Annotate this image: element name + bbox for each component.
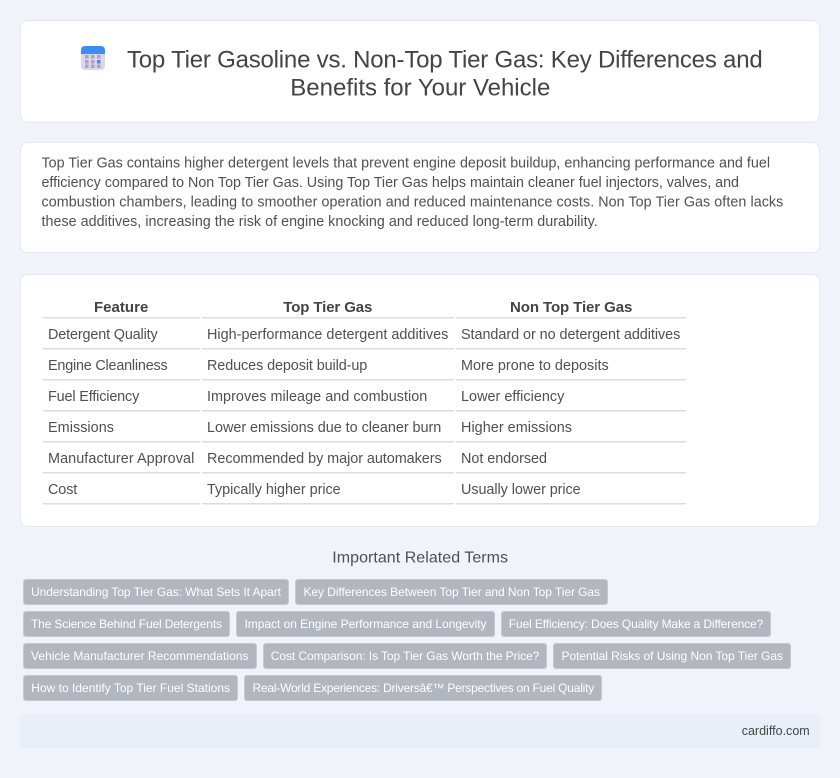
panel: title header <box>20 20 820 122</box>
tag: key differences <box>296 580 608 604</box>
table row: emissions: Higher emissions <box>461 420 572 436</box>
table row: fuel efficiency: Lower efficiency <box>461 389 565 405</box>
table row: manufacturer approval: Not endorsed <box>461 451 547 467</box>
text block: summary: these additives, increasing the risk of engine knocking and reduced long-term durability. <box>42 214 598 230</box>
table row: engine cleanliness: More prone to deposits <box>461 358 609 374</box>
title: Benefits for Your Vehicle <box>290 75 550 102</box>
table row: manufacturer approval: Manufacturer Approval <box>48 451 194 467</box>
tag: engine performance: Impact on Engine Performance and Longevity <box>244 617 486 631</box>
tag: key differences: Key Differences Between Top Tier and Non Top Tier Gas <box>304 585 600 599</box>
tag list: related terms <box>24 580 790 700</box>
table row: cost: Typically higher price <box>207 482 341 498</box>
text block: summary: efficiency compared to Non Top Tier Gas. Using Top Tier Gas helps maintain cleaner fuel injectors, valves, and <box>42 175 739 191</box>
table row: fuel efficiency <box>48 389 565 405</box>
panel: comparison table <box>20 274 820 526</box>
tag: potential risks: Potential Risks of Using Non Top Tier Gas <box>562 649 783 663</box>
table row: emissions <box>48 420 572 436</box>
table header: Feature <box>94 299 148 316</box>
tag: science behind fuel detergents: The Science Behind Fuel Detergents <box>31 617 222 631</box>
tag: cost comparison <box>264 644 546 668</box>
tag: real-world experiences: Real-World Experiences: Driversâ€™ Perspectives on Fuel Quality <box>252 681 594 695</box>
footer credit: cardiffo.com <box>742 724 810 738</box>
tag: identify stations: How to Identify Top Tier Fuel Stations <box>31 681 230 695</box>
table row: manufacturer approval: Recommended by major automakers <box>207 451 442 467</box>
table row: detergent quality: Detergent Quality <box>48 327 158 343</box>
table header: Non Top Tier Gas <box>510 299 632 316</box>
tag: manufacturer recommendations <box>24 644 256 668</box>
tag: potential risks <box>554 644 790 668</box>
table row: fuel efficiency: Improves mileage and combustion <box>207 389 427 405</box>
tag: real-world experiences <box>244 676 602 700</box>
panel: summary paragraph <box>20 142 820 252</box>
table row: manufacturer approval <box>48 451 547 467</box>
table row: engine cleanliness: Engine Cleanliness <box>48 358 168 374</box>
table row: engine cleanliness <box>48 358 609 374</box>
tag: science behind fuel detergents <box>24 612 230 636</box>
tag: fuel efficiency <box>502 612 770 636</box>
tag: fuel efficiency: Fuel Efficiency: Does Quality Make a Difference? <box>509 617 764 631</box>
text block: summary: Top Tier Gas contains higher detergent levels that prevent engine deposit buildup, enhancing performance and fuel <box>42 156 770 172</box>
tag: identify stations <box>24 676 238 700</box>
text block: summary: combustion chambers, leading to smoother operation and reduced maintenance costs. Non Top Tier Gas often lacks <box>42 194 783 210</box>
tag: manufacturer recommendations: Vehicle Manufacturer Recommendations <box>31 649 248 663</box>
table row: cost: Usually lower price <box>461 482 581 498</box>
tag: cost comparison: Cost Comparison: Is Top Tier Gas Worth the Price? <box>271 649 540 663</box>
text block: summary <box>42 156 783 230</box>
table row: cost <box>48 482 581 498</box>
table header: Top Tier Gas <box>283 299 372 316</box>
table row: cost: Cost <box>48 482 77 498</box>
table row: fuel efficiency: Fuel Efficiency <box>48 389 140 405</box>
tag: understanding top tier gas <box>24 580 288 604</box>
table row: emissions: Emissions <box>48 420 114 436</box>
title <box>127 46 763 102</box>
tag: engine performance <box>236 612 494 636</box>
table row: emissions: Lower emissions due to cleaner burn <box>207 420 441 436</box>
footer bar <box>20 714 820 748</box>
table row: detergent quality <box>48 327 680 343</box>
table row: detergent quality: Standard or no detergent additives <box>461 327 680 343</box>
table row: engine cleanliness: Reduces deposit build-up <box>207 358 367 374</box>
table row: detergent quality: High-performance detergent additives <box>207 327 448 343</box>
tag: understanding top tier gas: Understanding Top Tier Gas: What Sets It Apart <box>31 585 282 599</box>
table header <box>94 299 632 316</box>
title: Top Tier Gasoline vs. Non-Top Tier Gas: Key Differences and <box>127 46 763 73</box>
icon: calendar <box>81 46 105 70</box>
heading: important related terms: Important Related Terms <box>332 550 508 566</box>
